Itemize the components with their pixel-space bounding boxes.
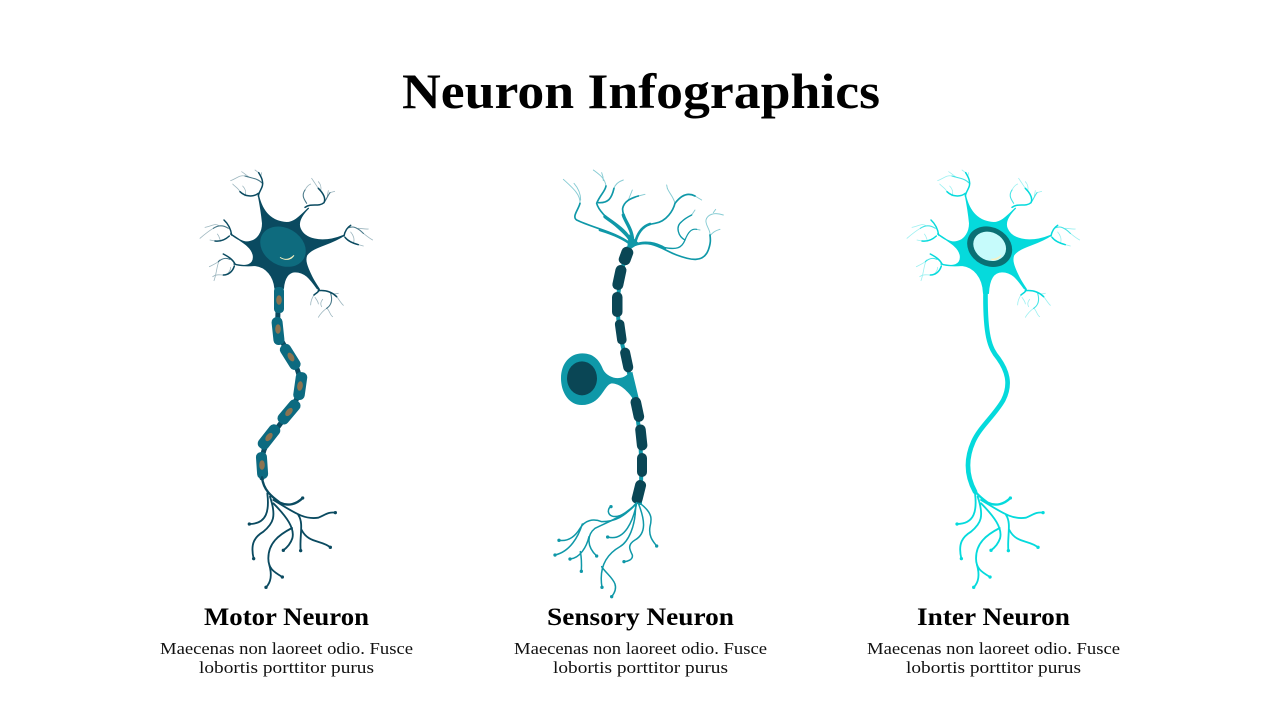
sensory description: Maecenas non laoreet odio. Fusce — [514, 639, 767, 658]
sensory heading: Sensory Neuron — [547, 604, 734, 631]
inter description: Maecenas non laoreet odio. Fusce — [867, 639, 1120, 658]
sensory cell body — [561, 353, 639, 405]
sensory dendrites — [563, 170, 723, 259]
inter description — [867, 639, 1120, 677]
inter dendrites and cell body — [907, 170, 1080, 317]
inter axon — [968, 283, 1008, 492]
sensory description — [514, 639, 767, 677]
motor description: lobortis porttitor purus — [199, 658, 374, 677]
inter heading: Inter Neuron — [917, 604, 1070, 631]
motor axon — [262, 288, 300, 478]
panel: sensory neuron — [514, 170, 767, 677]
inter axon terminals — [955, 477, 1045, 589]
sensory axon — [618, 248, 641, 503]
sensory myelin segments — [611, 245, 648, 505]
motor description: Maecenas non laoreet odio. Fusce — [160, 639, 413, 658]
myelin segments — [256, 287, 308, 479]
inter neuron illustration — [907, 170, 1080, 589]
myelin nuclei — [259, 295, 303, 470]
inter description: lobortis porttitor purus — [906, 658, 1081, 677]
sensory description: lobortis porttitor purus — [553, 658, 728, 677]
title: Neuron Infographics — [402, 63, 880, 119]
motor dendrites and cell body — [200, 170, 373, 317]
panel: inter neuron — [867, 170, 1120, 677]
motor neuron illustration — [200, 170, 373, 589]
motor description — [160, 639, 413, 677]
sensory neuron illustration — [553, 170, 723, 598]
panel: motor neuron — [160, 170, 413, 677]
motor axon terminals — [248, 477, 337, 589]
motor heading: Motor Neuron — [204, 604, 369, 631]
sensory axon terminals — [553, 503, 658, 598]
